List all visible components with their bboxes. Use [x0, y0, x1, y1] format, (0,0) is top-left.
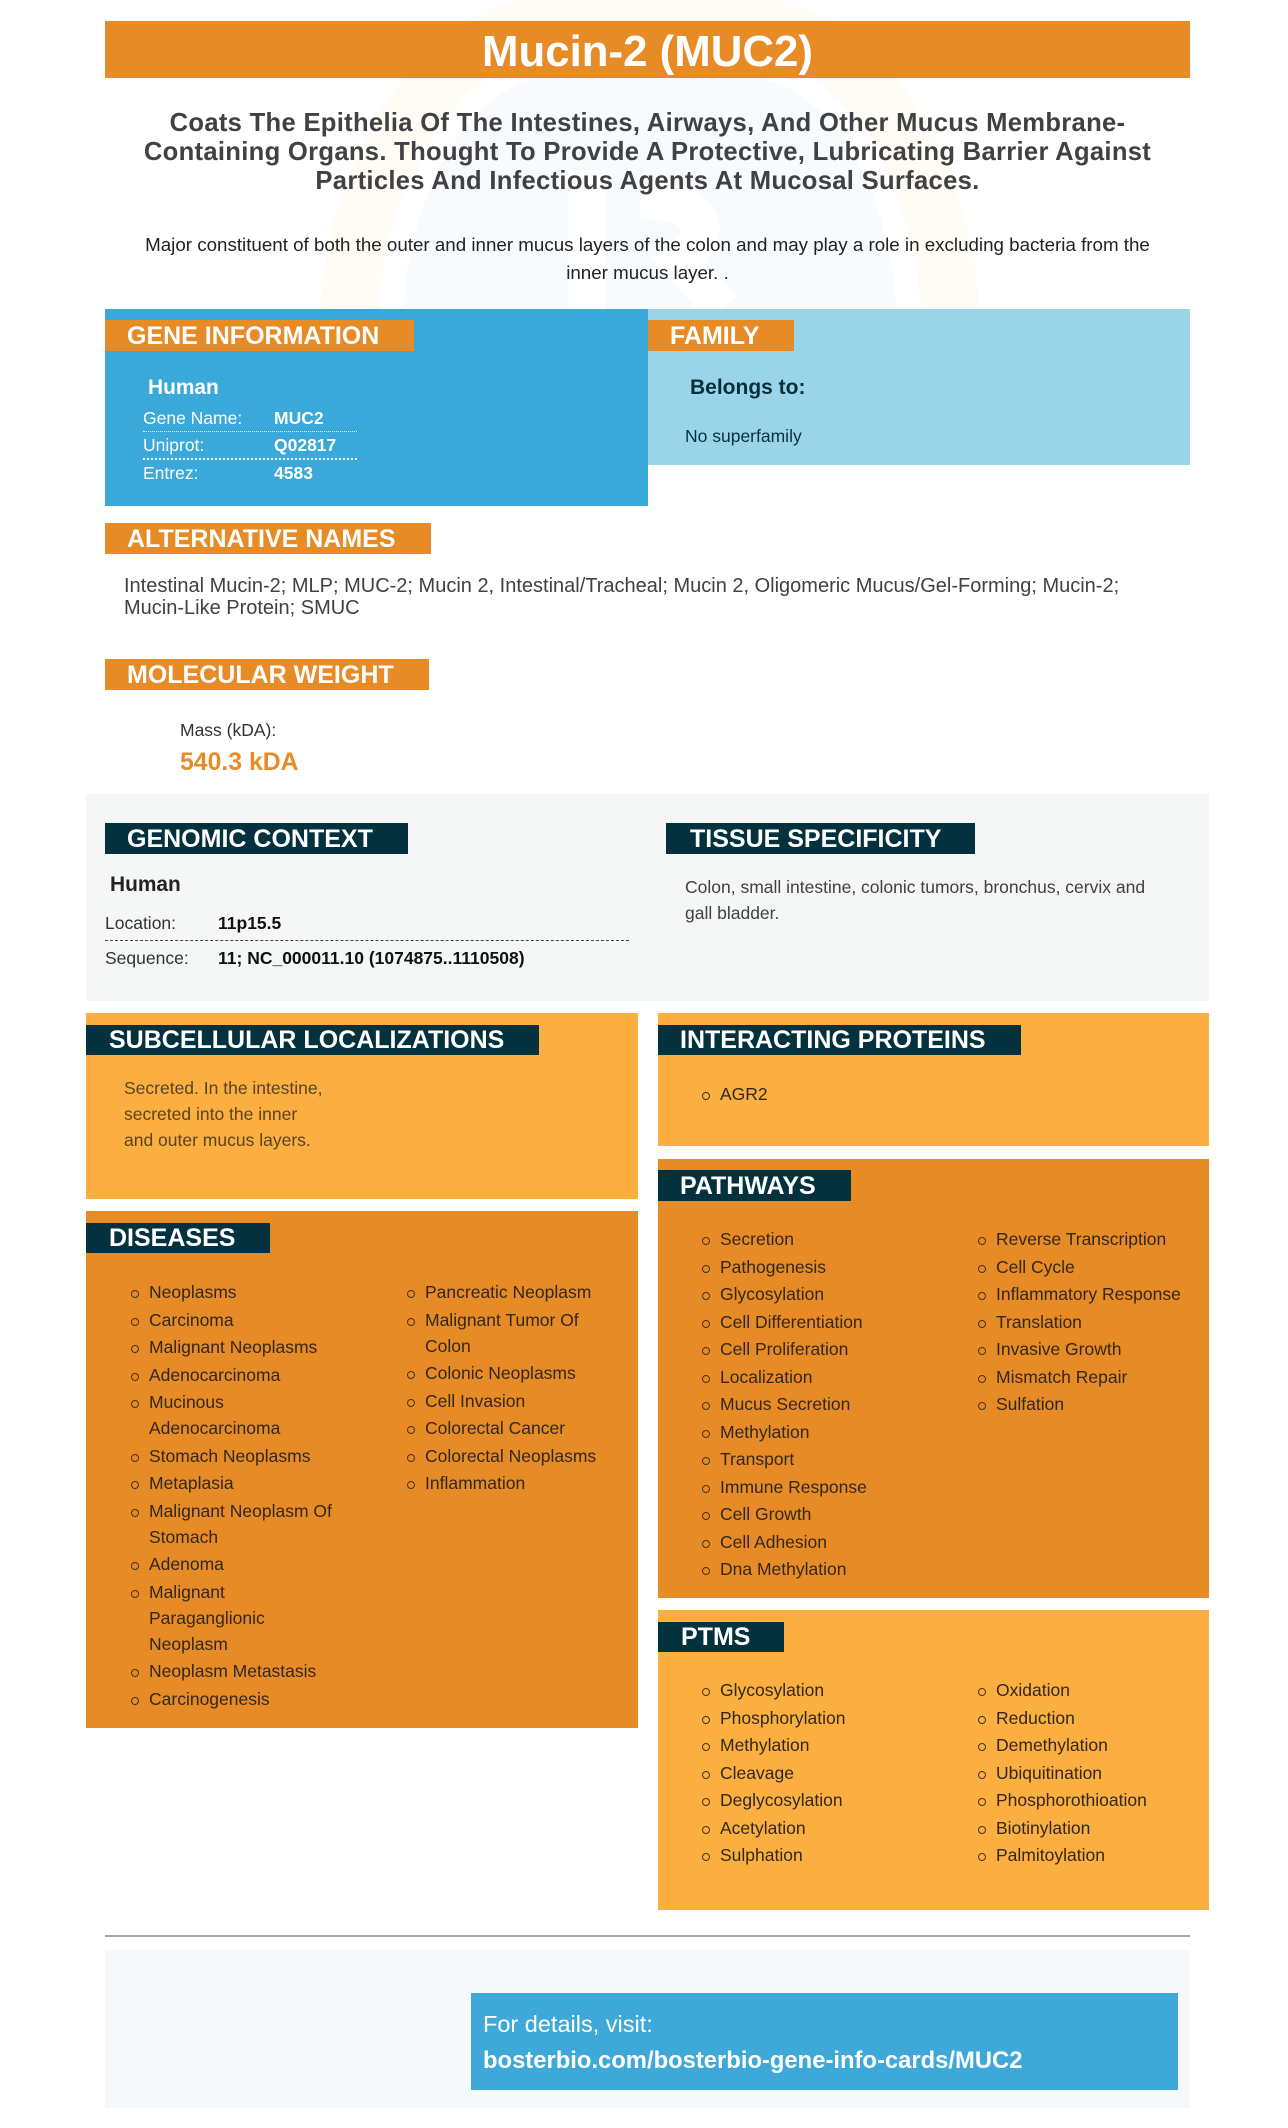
subtitle: Coats The Epithelia Of The Intestines, Airways, And Other Mucus Membrane-	[170, 109, 1125, 137]
description	[145, 234, 1150, 283]
list: pathways column 1: Immune Response	[720, 1477, 867, 1497]
list: pathways column 1: Localization	[720, 1367, 812, 1387]
list: diseases column 2: Colon	[425, 1336, 471, 1356]
localization text: Secreted. In the intestine,	[124, 1078, 322, 1098]
list: pathways column 1: Methylation	[720, 1422, 810, 1442]
panel: gene information: Q02817	[274, 435, 336, 455]
heading: gene information: GENE INFORMATION	[127, 322, 379, 350]
details label: For details, visit:	[483, 2011, 653, 2037]
list: diseases column 2: Colonic Neoplasms	[425, 1363, 576, 1383]
panel: gene information: 4583	[274, 463, 313, 483]
uniprot row: Uniprot:	[143, 435, 204, 455]
divider	[143, 458, 357, 460]
list: diseases column 1: Adenocarcinoma	[149, 1364, 280, 1384]
list: diseases column 1: Malignant Neoplasm Of	[149, 1500, 332, 1520]
watermark logo	[320, 1, 979, 309]
tissue specificity text	[685, 877, 1145, 923]
list: ptms column 1: Acetylation	[720, 1818, 806, 1838]
localization text: secreted into the inner	[124, 1104, 297, 1124]
heading: interacting proteins: INTERACTING PROTEINS	[680, 1026, 986, 1054]
species label: Human	[110, 873, 181, 896]
list: pathways column 2: Cell Cycle	[996, 1257, 1075, 1277]
list: pathways column 1: Transport	[720, 1449, 794, 1469]
subtitle: Particles And Infectious Agents At Mucosal Surfaces.	[315, 167, 980, 195]
list: pathways column 1: Pathogenesis	[720, 1257, 826, 1277]
list: diseases column 1: Carcinoma	[149, 1310, 234, 1330]
location row: Location:	[105, 913, 176, 933]
panel: gene information: MUC2	[274, 408, 324, 428]
title: Mucin-2 (MUC2)	[482, 27, 813, 76]
panel: genomic context and tissue specificity: 11p15.5	[218, 913, 281, 933]
list: ptms column 2: Biotinylation	[996, 1818, 1090, 1838]
heading: family: FAMILY	[670, 322, 759, 350]
gene name row: Gene Name:	[143, 408, 242, 428]
callout: details link	[471, 1993, 1178, 2090]
list: pathways column 1: Cell Growth	[720, 1504, 811, 1524]
list: interacting proteins: AGR2	[720, 1084, 768, 1104]
list: pathways column 1: Secretion	[720, 1229, 794, 1249]
list: diseases column 2	[407, 1282, 596, 1493]
alternative names text: Intestinal Mucin-2; MLP; MUC-2; Mucin 2, Intestinal/Tracheal; Mucin 2, Oligomeric Mucus/Gel-Forming; Mucin-2;	[124, 575, 1119, 597]
list: diseases column 1: Stomach Neoplasms	[149, 1446, 310, 1466]
entrez row: Entrez:	[143, 463, 198, 483]
list: pathways column 2: Invasive Growth	[996, 1339, 1121, 1359]
sequence row: Sequence:	[105, 948, 189, 968]
list: ptms column 2: Reduction	[996, 1708, 1075, 1728]
divider	[105, 940, 629, 941]
panel: genomic context and tissue specificity: 11; NC_000011.10 (1074875..1110508)	[218, 948, 525, 968]
list: pathways column 2	[978, 1229, 1181, 1414]
tissue specificity text: gall bladder.	[685, 903, 779, 923]
tissue specificity text: Colon, small intestine, colonic tumors, bronchus, cervix and	[685, 877, 1145, 897]
list: pathways column 1	[702, 1229, 867, 1579]
list: diseases column 1: Carcinogenesis	[149, 1688, 270, 1708]
localization text	[124, 1078, 322, 1150]
list: pathways column 2: Reverse Transcription	[996, 1229, 1166, 1249]
list: ptms column 2: Oxidation	[996, 1680, 1070, 1700]
list: diseases column 2: Cell Invasion	[425, 1390, 525, 1410]
list: ptms column 1: Deglycosylation	[720, 1790, 843, 1810]
heading: molecular weight: MOLECULAR WEIGHT	[127, 661, 394, 689]
panel: ptms	[658, 1610, 1209, 1910]
list: pathways column 1: Cell Proliferation	[720, 1339, 848, 1359]
list: pathways column 1: Dna Methylation	[720, 1559, 846, 1579]
heading: ptms	[658, 1622, 784, 1652]
list: ptms column 2: Palmitoylation	[996, 1845, 1105, 1865]
localization text: and outer mucus layers.	[124, 1130, 311, 1150]
subtitle	[144, 109, 1151, 195]
list: pathways column 2: Inflammatory Response	[996, 1284, 1181, 1304]
heading: genomic context: GENOMIC CONTEXT	[127, 825, 373, 853]
list: ptms column 1: Cleavage	[720, 1763, 794, 1783]
panel: genomic context and tissue specificity	[86, 794, 1209, 1001]
alternative names text	[124, 575, 1119, 619]
uniprot row	[143, 435, 336, 455]
description: inner mucus layer. .	[566, 262, 729, 283]
entrez row	[143, 463, 313, 483]
list: ptms column 1: Methylation	[720, 1735, 810, 1755]
list: pathways column 1: Mucus Secretion	[720, 1394, 850, 1414]
belongs to label: Belongs to:	[690, 376, 806, 399]
list: pathways column 2: Sulfation	[996, 1394, 1064, 1414]
list: diseases column 1	[131, 1282, 332, 1708]
panel: family	[648, 309, 1190, 465]
panel: pathways	[658, 1159, 1209, 1598]
list: diseases column 2: Malignant Tumor Of	[425, 1310, 579, 1330]
list: ptms column 2	[978, 1680, 1147, 1865]
list: pathways column 2: Translation	[996, 1312, 1082, 1332]
heading: pathways: PATHWAYS	[680, 1172, 816, 1200]
list: diseases column 1: Stomach	[149, 1526, 218, 1546]
species label: Human	[148, 376, 219, 399]
list: ptms column 2: Ubiquitination	[996, 1763, 1102, 1783]
heading: subcellular localizations: SUBCELLULAR LOCALIZATIONS	[109, 1026, 504, 1054]
list: pathways column 1: Cell Adhesion	[720, 1532, 827, 1552]
mass label: Mass (kDA):	[180, 720, 276, 740]
gene name row	[143, 408, 324, 428]
alternative names text: Mucin-Like Protein; SMUC	[124, 597, 360, 619]
list: ptms column 1: Phosphorylation	[720, 1708, 846, 1728]
list: diseases column 1: Malignant	[149, 1582, 225, 1602]
list: diseases column 1: Adenoma	[149, 1554, 224, 1574]
panel: diseases	[86, 1211, 638, 1728]
list: diseases column 1: Mucinous	[149, 1392, 224, 1412]
list: diseases column 2: Colorectal Neoplasms	[425, 1446, 596, 1466]
list: ptms column 2: Demethylation	[996, 1735, 1108, 1755]
panel: subcellular localizations	[86, 1013, 638, 1199]
panel: footer	[105, 1950, 1190, 2108]
list: ptms column 1	[702, 1680, 846, 1865]
heading: family	[648, 320, 794, 351]
heading: alternative names: ALTERNATIVE NAMES	[127, 525, 396, 553]
list: diseases column 1: Adenocarcinoma	[149, 1418, 280, 1438]
details url: bosterbio.com/bosterbio-gene-info-cards/MUC2	[483, 2047, 1022, 2074]
heading: pathways	[658, 1170, 851, 1201]
divider	[143, 431, 357, 432]
mass value: 540.3 kDA	[180, 749, 299, 776]
list: pathways column 2: Mismatch Repair	[996, 1367, 1127, 1387]
list: pathways column 1: Glycosylation	[720, 1284, 824, 1304]
list: diseases column 1: Neoplasm Metastasis	[149, 1661, 316, 1681]
title	[105, 21, 1190, 78]
heading: diseases: DISEASES	[109, 1224, 235, 1252]
list: diseases column 1: Malignant Neoplasms	[149, 1337, 317, 1357]
family value: No superfamily	[685, 426, 802, 446]
heading: diseases	[86, 1223, 270, 1253]
list: diseases column 1: Metaplasia	[149, 1473, 234, 1493]
list: diseases column 2: Colorectal Cancer	[425, 1418, 565, 1438]
heading: ptms: PTMS	[681, 1623, 750, 1651]
list: diseases column 1: Paraganglionic	[149, 1608, 265, 1628]
list: diseases column 1: Neoplasms	[149, 1282, 237, 1302]
panel: gene information	[105, 309, 648, 506]
panel: interacting proteins	[658, 1013, 1209, 1146]
list: diseases column 1: Neoplasm	[149, 1634, 228, 1654]
list: pathways column 1: Cell Differentiation	[720, 1312, 863, 1332]
list: ptms column 1: Glycosylation	[720, 1680, 824, 1700]
subtitle: Containing Organs. Thought To Provide A Protective, Lubricating Barrier Against	[144, 138, 1151, 166]
location row	[105, 913, 281, 933]
sequence row	[105, 948, 525, 968]
list: diseases column 2: Inflammation	[425, 1473, 525, 1493]
list: diseases column 2: Pancreatic Neoplasm	[425, 1282, 591, 1302]
heading: tissue specificity: TISSUE SPECIFICITY	[690, 825, 941, 853]
list: ptms column 2: Phosphorothioation	[996, 1790, 1147, 1810]
description: Major constituent of both the outer and inner mucus layers of the colon and may play a role in excluding bacteria from the	[145, 234, 1150, 255]
list: ptms column 1: Sulphation	[720, 1845, 803, 1865]
